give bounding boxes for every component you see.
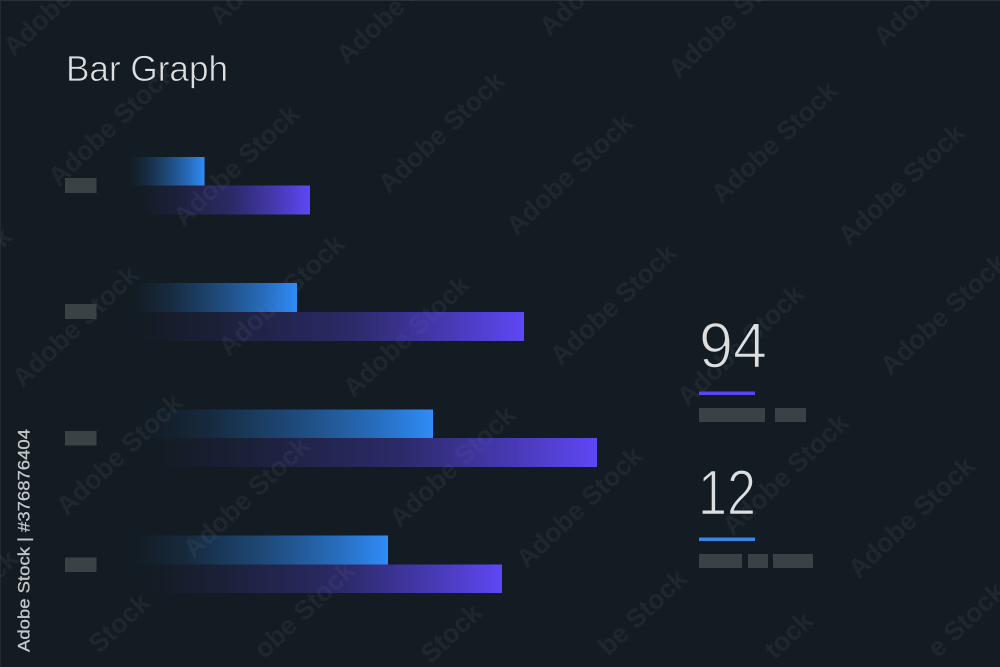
watermark pattern: Stock [415, 597, 488, 667]
bar chart [65, 157, 597, 593]
watermark pattern: Adobe Stock [212, 228, 350, 362]
row 1 purple bar [140, 186, 310, 214]
watermark pattern: Adobe Stock [544, 237, 682, 371]
row 2 label placeholder [65, 304, 96, 319]
row 3 blue bar [150, 410, 433, 438]
watermark pattern: Adobe Stock [50, 387, 188, 521]
row 2 blue bar [135, 283, 297, 312]
watermark pattern: Adobe Stock [842, 450, 980, 584]
row 4 label placeholder [65, 558, 96, 572]
purple underline [699, 392, 755, 395]
blue underline [699, 538, 755, 541]
row 1 label placeholder [65, 178, 96, 193]
row 4 purple bar [150, 564, 502, 593]
caption placeholder 1 [699, 554, 742, 568]
watermark pattern: Stock [83, 587, 156, 659]
watermark pattern: Adobe Stock [42, 58, 180, 192]
watermark pattern: Adobe Stock [383, 399, 521, 533]
watermark pattern: tock [758, 605, 819, 665]
watermark pattern: Adobe Stock [500, 107, 638, 241]
caption placeholder 3 [773, 554, 813, 568]
watermark pattern: Adobe Stock [510, 440, 648, 574]
watermark pattern: Adobe Stock [832, 117, 970, 251]
watermark pattern: Adobe Stock [337, 269, 475, 403]
row 2 purple bar [140, 312, 524, 341]
watermark pattern: Adobe Stock [705, 75, 843, 209]
stat: 94 [699, 310, 806, 422]
watermark pattern: Adobe Stock [716, 407, 854, 541]
row 3 label placeholder [65, 431, 96, 446]
watermark pattern: Adobe Stock [6, 259, 144, 393]
title: Bar Graph [66, 48, 228, 89]
watermark pattern: Adobe Stock [167, 98, 305, 232]
number 94: 94 [699, 310, 767, 382]
watermark pattern: Adobe Stock [372, 65, 510, 199]
caption placeholder long [699, 408, 765, 422]
watermark pattern: Adobe Stock [177, 430, 315, 564]
watermark pattern: obe Stock [248, 555, 361, 664]
caption placeholder short [775, 408, 806, 422]
stat: 12 [698, 456, 813, 568]
number 12: 12 [698, 456, 756, 528]
watermark pattern: be Stock [592, 563, 693, 661]
stock id side text: Adobe Stock | #376876404 [16, 429, 34, 652]
row 1 blue bar [130, 157, 204, 186]
caption placeholder 2 [748, 554, 768, 568]
row 4 blue bar [135, 536, 388, 564]
watermark pattern: Adobe Stock [671, 278, 809, 412]
row 3 purple bar [160, 438, 597, 467]
